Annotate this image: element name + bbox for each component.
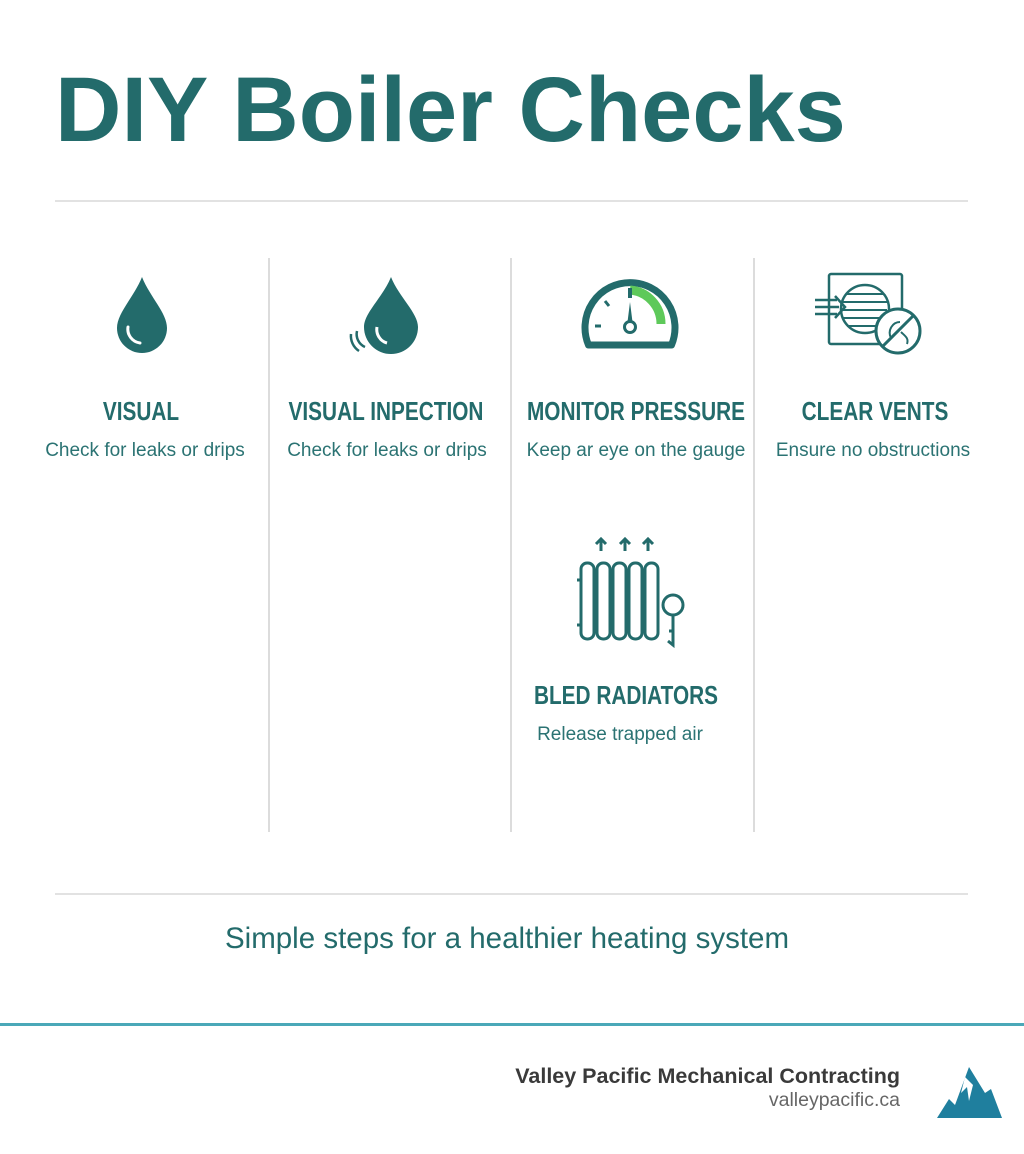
- icon: vent: [815, 272, 922, 354]
- icon: drop with waves: [350, 277, 418, 354]
- footer company: Valley Pacific Mechanical Contracting: [515, 1064, 900, 1088]
- heading: bled radiators: BLED RADIATORS: [534, 680, 718, 710]
- icon: gauge: [582, 279, 678, 348]
- heading: visual: VISUAL: [103, 396, 179, 426]
- text: clear vents: Ensure no obstructions: [776, 440, 970, 461]
- text: visual: Check for leaks or drips: [45, 440, 245, 461]
- text: visual inpection: Check for leaks or drips: [287, 440, 487, 461]
- heading: clear vents: CLEAR VENTS: [802, 396, 948, 426]
- icon: water drop: [117, 277, 167, 353]
- footer company: [515, 1064, 900, 1111]
- logo: mountain: [937, 1067, 1002, 1118]
- text: monitor pressure: Keep ar eye on the gauge: [527, 440, 745, 461]
- title: DIY Boiler Checks: [55, 59, 846, 161]
- heading: visual inpection: VISUAL INPECTION: [289, 396, 483, 426]
- heading: monitor pressure: MONITOR PRESSURE: [527, 396, 745, 426]
- icon: radiator: [577, 537, 684, 648]
- tagline: Simple steps for a healthier heating system: [225, 922, 789, 955]
- text: bled radiators: Release trapped air: [537, 724, 703, 745]
- footer company: valleypacific.ca: [769, 1089, 900, 1111]
